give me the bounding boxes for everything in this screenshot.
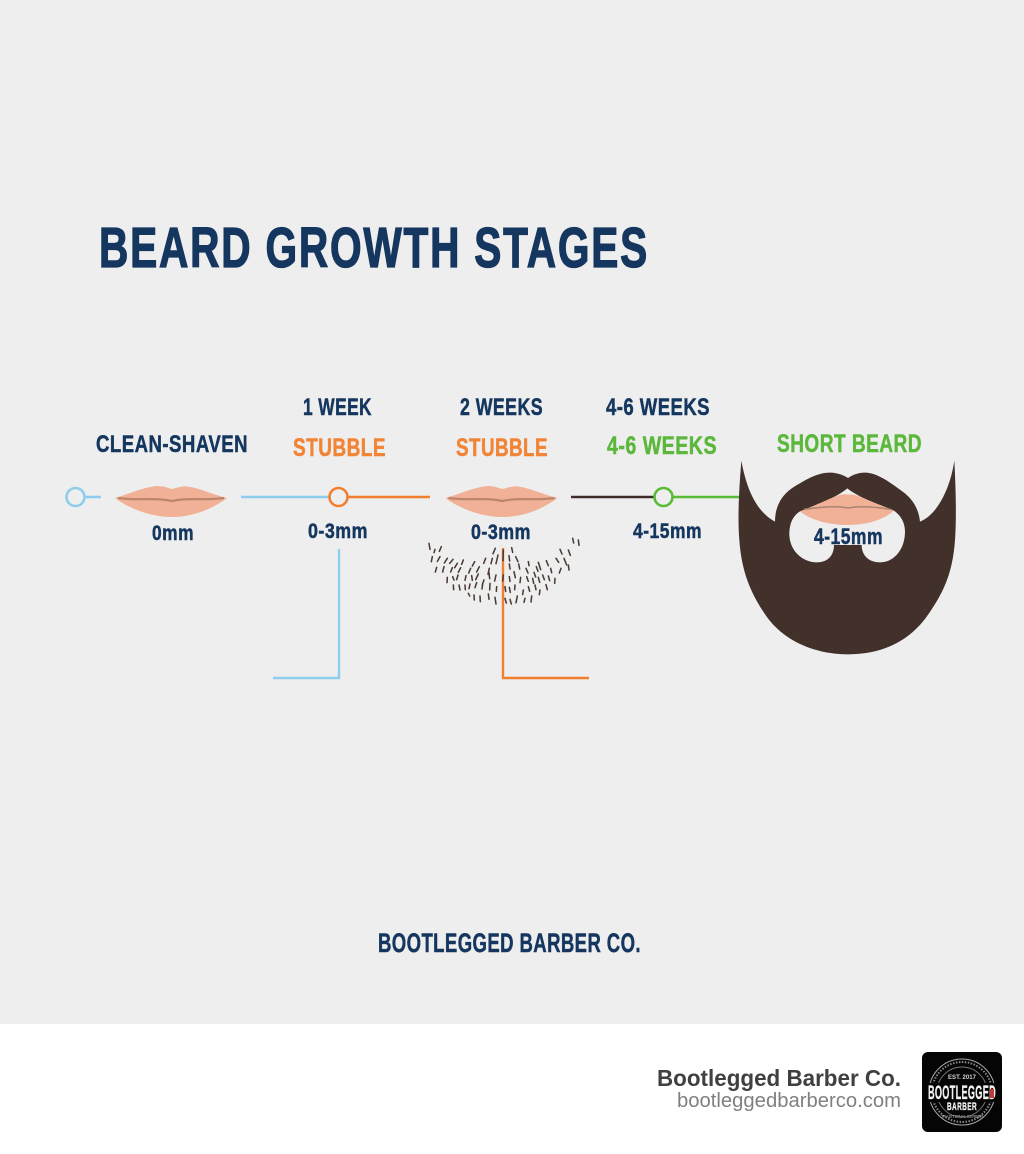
stage: 4-6 weeks [606,394,717,543]
stage: short beard [739,430,956,654]
stage: 1 week stubble [273,394,386,678]
label: 4-6 weeks navy: 4-6 WEEKS [606,394,710,421]
logo: TRADITIONAL BARBER [941,1114,984,1119]
measurement: 0-3mm: 0-3mm [308,520,368,543]
title: BEARD GROWTH STAGES [99,216,649,280]
logo: BARBER [947,1101,977,1113]
logo [922,1052,1002,1132]
label: clean-shaven: CLEAN-SHAVEN [96,431,248,458]
footer [0,1024,1024,1154]
label: 1 week: 1 WEEK [303,394,372,421]
measurement: 4-15mm: 4-15mm [814,524,883,549]
brand line: BOOTLEGGED BARBER CO. [378,928,641,958]
label: stubble: STUBBLE [293,434,386,462]
timeline [66,488,741,506]
icon: beard lips [800,494,894,525]
stage: clean-shaven [96,431,248,545]
logo: EST. 2017 [948,1075,977,1081]
icon: lips [446,486,558,517]
measurement: 0-3mm: 0-3mm [471,521,531,544]
icon: beard [739,461,956,654]
measurement: 4-15mm: 4-15mm [633,520,702,543]
stage: 2 weeks stubble [429,394,589,678]
label: 4-6 weeks green: 4-6 WEEKS [607,432,717,460]
icon: stubble hairs [429,538,579,604]
label: 2 weeks: 2 WEEKS [460,394,543,421]
measurement: 0mm: 0mm [152,522,194,545]
footer: company name: Bootlegged Barber Co. [657,1065,901,1091]
footer: website: bootleggedbarberco.com [677,1090,901,1112]
connector: orange bracket [503,548,589,678]
connector: blue bracket [273,549,339,678]
icon: lips [115,486,227,517]
label: stubble: STUBBLE [456,434,548,462]
label: short beard: SHORT BEARD [777,430,922,458]
